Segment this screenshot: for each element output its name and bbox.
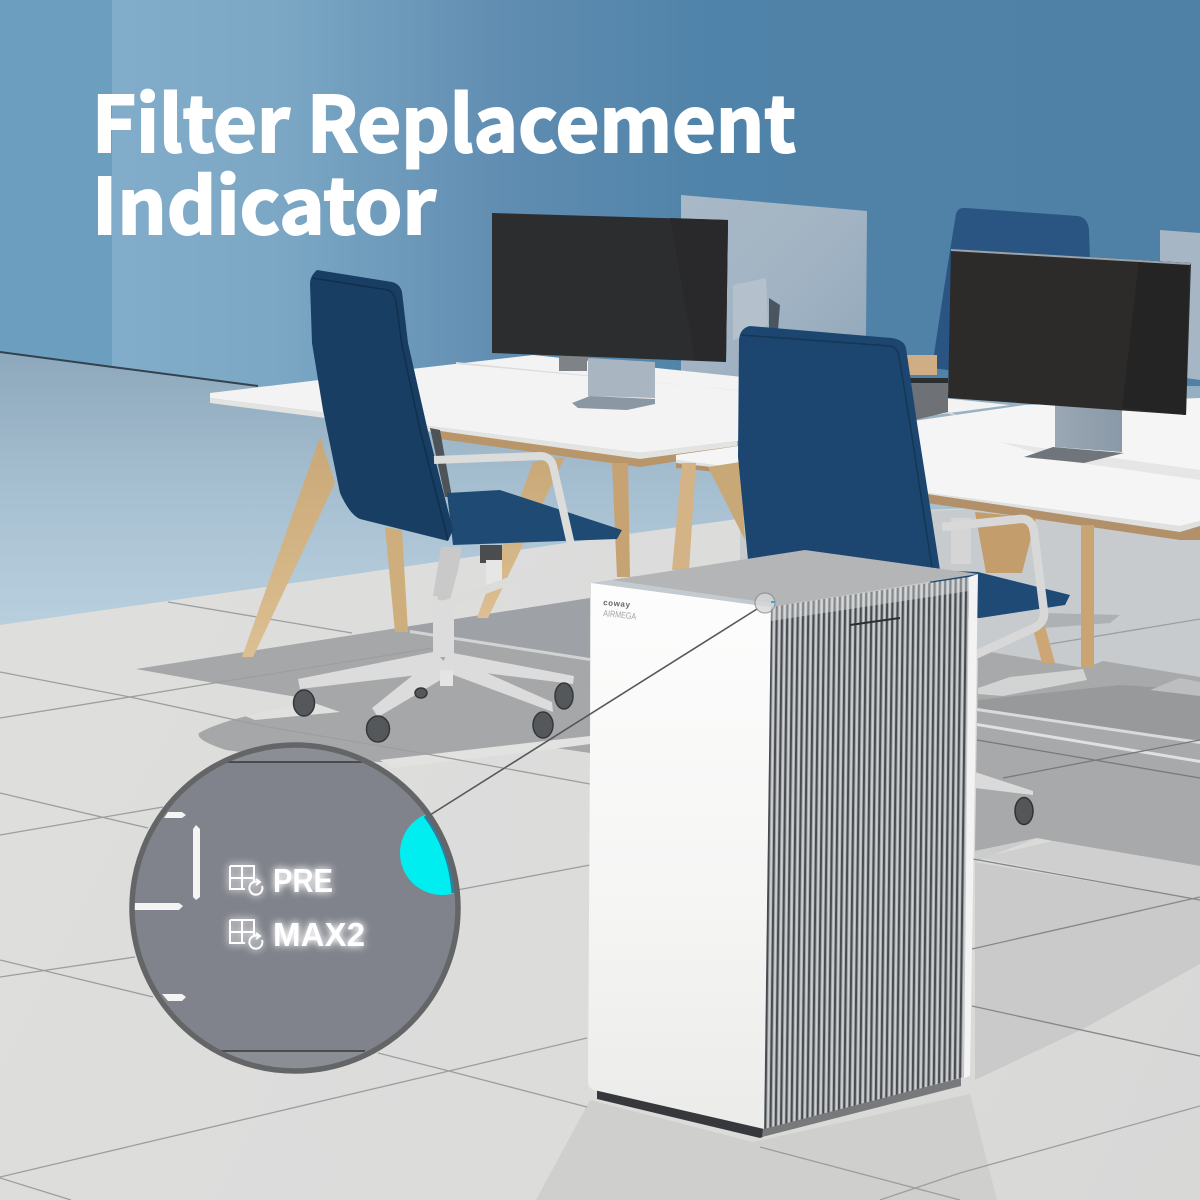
callout line — [430, 609, 757, 815]
chair 1 seat — [447, 490, 622, 545]
chair 2 back rest — [738, 326, 940, 570]
right fins — [764, 577, 969, 1129]
icon: filter MAX2 — [230, 920, 262, 949]
vent slot — [850, 618, 900, 625]
desk 1 items: tray — [905, 355, 948, 420]
right end cap — [964, 574, 978, 1078]
display segments — [130, 812, 200, 1001]
background: blue wall — [0, 0, 1200, 420]
magnified indicator circle — [130, 740, 484, 1075]
chair 1 arm — [434, 456, 571, 604]
monitor 1 — [492, 213, 728, 410]
lens top and bottom bands — [221, 748, 366, 1068]
front top bevel — [592, 580, 770, 607]
chair 2 back seam — [741, 335, 932, 568]
background: wall base line — [0, 352, 258, 386]
circle outline — [132, 745, 458, 1071]
chair 2 — [738, 326, 1070, 824]
chair 1 — [294, 270, 622, 742]
background: carpet floor — [0, 352, 1200, 625]
chair 1 back rest — [310, 270, 453, 541]
air purifier — [588, 550, 978, 1138]
label: PRE: PRE — [273, 862, 333, 899]
chair 2 arm — [942, 519, 1044, 655]
floor tile lines — [0, 602, 1200, 1200]
front face — [588, 583, 771, 1129]
base — [597, 1090, 763, 1138]
chair 2 seat — [930, 570, 1070, 618]
title: Filter Replacement — [92, 64, 796, 175]
background: tiled floor — [0, 498, 1200, 1200]
fin tops highlight — [771, 577, 969, 621]
icon: filter PRE — [230, 866, 262, 895]
chair 2 column — [951, 518, 971, 564]
plinth — [762, 1078, 961, 1137]
cyan light edge — [425, 816, 453, 893]
desk 1 wooden legs — [242, 437, 630, 657]
chair 1 columns — [432, 545, 502, 602]
label: MAX2: MAX2 — [273, 916, 365, 953]
desk 1 — [210, 355, 1010, 467]
desk 2 — [676, 398, 1200, 540]
back monitor (silver rear view) — [681, 195, 867, 388]
chair 2 wheel — [975, 772, 1033, 824]
title: Indicator — [92, 146, 436, 257]
cyan indicator light — [400, 814, 454, 895]
top panel — [592, 550, 978, 607]
monitor 3 — [948, 249, 1191, 463]
chair 1 base with five legs — [298, 607, 574, 717]
small lens on purifier — [755, 593, 775, 613]
logo: coway: coway — [603, 598, 631, 609]
chair 1 back strut — [430, 428, 452, 497]
logo: AIRMEGA: AIRMEGA — [603, 608, 637, 621]
floor shadows — [136, 598, 1200, 1200]
chair 1 back seam — [312, 278, 448, 540]
title — [92, 64, 796, 257]
back chair — [932, 208, 1090, 370]
right far monitor rear — [1160, 230, 1200, 380]
chair 1 casters — [294, 683, 573, 742]
desk 2 wooden legs — [672, 462, 1094, 668]
